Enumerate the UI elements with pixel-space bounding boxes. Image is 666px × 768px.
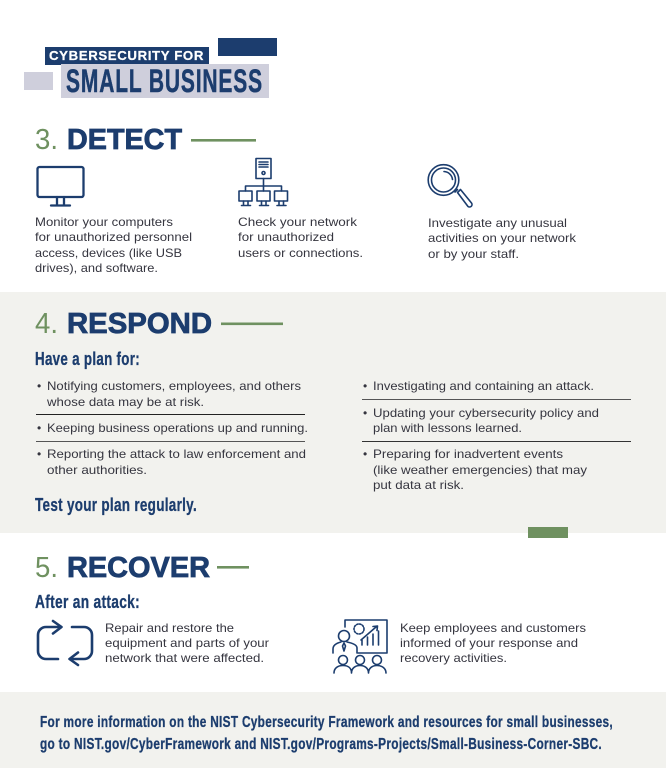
text: monitor computers	[35, 215, 192, 275]
title block: CYBERSECURITY FOR	[49, 49, 204, 63]
text: keep informed: recovery activities.	[400, 651, 507, 665]
list: left column: Reporting the attack to law enforcement and	[47, 447, 306, 461]
text: check network: for unauthorized	[238, 230, 334, 244]
text: keep informed	[400, 621, 586, 665]
icon: network	[239, 158, 288, 206]
text: investigate	[428, 216, 577, 261]
list: left column: Notifying customers, employees, and others	[47, 379, 301, 393]
heading: 3. detect	[35, 124, 256, 156]
heading: 4. respond: 4.	[35, 308, 58, 340]
list: left column: •	[37, 421, 41, 435]
heading: 4. respond: RESPOND	[67, 308, 212, 340]
text: keep informed: informed of your response and	[400, 636, 578, 650]
list: right column: (like weather emergencies) that may	[373, 463, 587, 477]
text: check network	[238, 215, 363, 260]
list: right column: Preparing for inadvertent events	[373, 447, 563, 461]
list: left column: whose data may be at risk.	[46, 395, 204, 409]
text: investigate: activities on your network	[428, 231, 577, 245]
heading: 5. recover	[35, 552, 249, 584]
panel: respond	[0, 292, 666, 533]
panel: footer	[0, 692, 666, 768]
list: right column: Investigating and containing an attack.	[373, 379, 594, 393]
subheading: after an attack: After an attack:	[35, 591, 140, 612]
heading: 4. respond	[35, 308, 283, 340]
section: detect	[35, 124, 577, 275]
text: check network: users or connections.	[238, 246, 363, 260]
icon: computer monitor	[38, 167, 84, 206]
icon: presentation to audience	[333, 620, 387, 673]
text: repair and restore: Repair and restore the	[105, 621, 234, 635]
list: left column: •	[37, 447, 41, 461]
list: right column: Updating your cybersecurity policy and	[373, 406, 599, 420]
text: monitor computers: for unauthorized personnel	[35, 230, 192, 244]
text: monitor computers: drives), and software.	[35, 261, 158, 275]
list: left column: other authorities.	[47, 463, 147, 477]
text: repair and restore	[105, 621, 269, 665]
section: recover	[35, 552, 586, 673]
text: check network: Check your network	[238, 215, 358, 229]
list: right column: plan with lessons learned.	[373, 421, 522, 435]
list: right column: •	[363, 447, 367, 461]
icon: magnifying glass	[428, 165, 472, 207]
heading: 3. detect: DETECT	[67, 124, 182, 156]
icon: recovery arrows	[38, 621, 92, 665]
list: right column	[362, 379, 631, 492]
list: right column: •	[363, 379, 367, 393]
text: repair and restore: network that were affected.	[105, 651, 264, 665]
subheading: have a plan for: Have a plan for:	[35, 348, 140, 369]
title block	[24, 38, 277, 99]
green accent block	[528, 527, 568, 538]
text: repair and restore: equipment and parts of your	[105, 636, 269, 650]
text: investigate: Investigate any unusual	[428, 216, 567, 230]
text: keep informed: Keep employees and customers	[400, 621, 586, 635]
heading: 5. recover: 5.	[35, 552, 58, 584]
list: left column	[36, 379, 308, 477]
text: investigate: or by your staff.	[428, 247, 519, 261]
heading: 5. recover: RECOVER	[67, 552, 210, 584]
title block: SMALL BUSINESS	[66, 63, 263, 99]
heading: 3. detect: 3.	[35, 124, 58, 156]
text: monitor computers: Monitor your computers	[35, 215, 173, 229]
list: right column: •	[363, 406, 367, 420]
list: left column: •	[37, 379, 41, 393]
callout: test your plan: Test your plan regularly.	[35, 494, 197, 515]
list: left column: Keeping business operations up and running.	[47, 421, 308, 435]
list: right column: put data at risk.	[373, 478, 464, 492]
text: monitor computers: access, devices (like USB	[35, 246, 182, 260]
